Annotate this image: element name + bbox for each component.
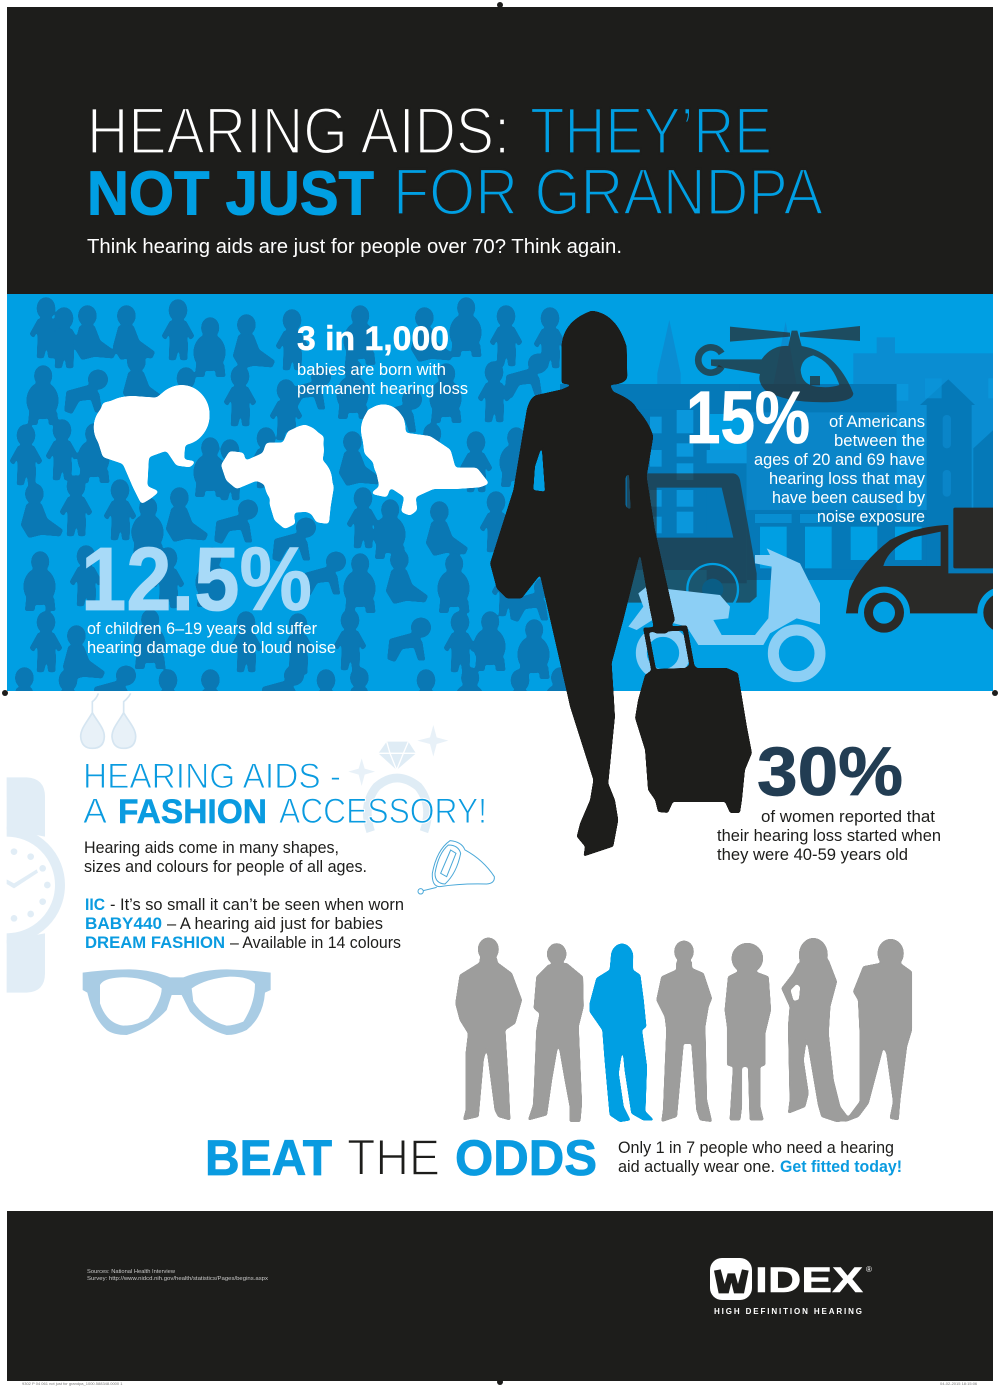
heading: fashion accessory: FASHION: [118, 793, 267, 831]
person 7: [845, 939, 912, 1122]
vehicle: van: [627, 473, 757, 615]
hearing aid model list: - It’s so small it can’t be seen when worn: [110, 896, 404, 914]
stat: 30%: of women reported that: [761, 808, 935, 826]
stat: 12.5%: of children 6–19 years old suffer: [87, 620, 317, 638]
stat: 30%: their hearing loss started when: [717, 827, 941, 845]
logo: Widex: [710, 1258, 872, 1316]
hearing aid model list: – Available in 14 colours: [230, 934, 401, 952]
icon: in-ear hearing aid: [418, 841, 494, 894]
icon: diamond ring: [348, 725, 448, 832]
call to action text: Get fitted today!: [780, 1158, 902, 1176]
hearing aid model list: [85, 896, 404, 952]
fashion body text: sizes and colours for people of all ages.: [84, 858, 367, 876]
logo: Widex: IDEX: [755, 1261, 864, 1300]
printer crop marks: 9302 P 04 061 not just for grandpa_1000.588348.0000 1: [22, 1381, 123, 1386]
stat: 3 in 1,000: permanent hearing loss: [297, 380, 468, 398]
subtitle: Think hearing aids are just for people over 70? Think again.: [87, 235, 622, 258]
person 6: [782, 938, 850, 1122]
stat: 15%: have been caused by: [772, 489, 926, 507]
person 2: [528, 944, 583, 1122]
people silhouettes row: [456, 938, 912, 1122]
fashion body text: [84, 839, 367, 876]
person 1: [456, 938, 522, 1120]
vehicle: helicopter: [698, 326, 860, 402]
call to action text: [618, 1139, 902, 1176]
stat: 12.5%: hearing damage due to loud noise: [87, 639, 336, 657]
stat: 15%: of Americans: [829, 413, 925, 431]
call to action text: Only 1 in 7 people who need a hearing: [618, 1139, 894, 1157]
vehicle: car with cargo: [846, 508, 1000, 639]
stat: 15%: [686, 376, 926, 526]
stat: 3 in 1,000: babies are born with: [297, 361, 446, 379]
stat: 3 in 1,000: 3 in 1,000: [297, 320, 449, 358]
footer panel: [7, 1211, 993, 1381]
hearing aid model list: DREAM FASHION: [85, 934, 225, 952]
heading: fashion accessory: [83, 757, 487, 831]
heading: fashion accessory: ACCESSORY!: [279, 792, 487, 831]
suitcase: [635, 628, 752, 813]
panel: blue statistics band: [7, 294, 1000, 730]
heading: beat the odds: THE: [347, 1129, 440, 1186]
hearing aid model list: BABY440: [85, 915, 162, 933]
stat: 30%: 30%: [757, 733, 903, 810]
vehicle: scooter: [628, 548, 820, 677]
heading: fashion accessory: A: [83, 792, 108, 831]
title line 2 light: FOR GRANDPA: [393, 154, 823, 228]
sources: Sources: National Health Interview: [87, 1269, 175, 1275]
stat: 30%: they were 40-59 years old: [717, 846, 908, 864]
heading: beat the odds: ODDS: [455, 1130, 597, 1186]
hearing aid model list: – A hearing aid just for babies: [167, 915, 383, 933]
stat: 12.5%: [86, 546, 336, 656]
header panel: [7, 7, 993, 294]
sources: Survey: http://www.nidcd.nih.gov/health/statistics/Pages/begins.aspx: [87, 1276, 268, 1282]
stat: 15%: 15%: [686, 376, 810, 459]
hearing aid model list: IIC: [85, 896, 105, 914]
person 5: [725, 943, 771, 1120]
icon: earrings: [81, 693, 136, 748]
stat: 15%: between the: [834, 432, 925, 450]
title line 1 blue: THEY’RE: [530, 94, 772, 168]
heading: fashion accessory: HEARING AIDS -: [83, 757, 341, 796]
fashion decorative icons: [7, 693, 494, 1035]
printer crop marks: 04-02-2015 18:15:06: [940, 1381, 978, 1386]
person 4: [657, 941, 712, 1122]
title line 2 bold: NOT JUST: [87, 160, 374, 228]
stat: 12.5%: 12.5%: [81, 530, 312, 630]
stat: 15%: hearing loss that may: [769, 470, 926, 488]
logo: Widex: ®: [866, 1265, 872, 1274]
stat: 3 in 1,000: [297, 320, 468, 398]
icon: three white babies: [94, 386, 488, 528]
woman with suitcase silhouette: [490, 311, 752, 857]
city buildings: [560, 320, 993, 583]
title line 1 white: HEARING AIDS:: [87, 94, 510, 168]
stat: 30%: [717, 733, 941, 864]
sources: [87, 1269, 268, 1282]
fashion body text: Hearing aids come in many shapes,: [84, 839, 339, 857]
baby silhouette pattern: [10, 297, 566, 691]
call to action text: aid actually wear one.: [618, 1158, 775, 1176]
logo: Widex: HIGH DEFINITION HEARING: [714, 1307, 862, 1316]
icon: wrist watch: [7, 777, 60, 993]
heading: beat the odds: BEAT: [205, 1130, 332, 1186]
stat: 15%: ages of 20 and 69 have: [754, 451, 925, 469]
person 3 highlighted blue: [590, 944, 653, 1122]
heading: beat the odds: [205, 1129, 597, 1186]
stat: 15%: noise exposure: [817, 508, 925, 526]
icon: glasses: [83, 969, 271, 1035]
